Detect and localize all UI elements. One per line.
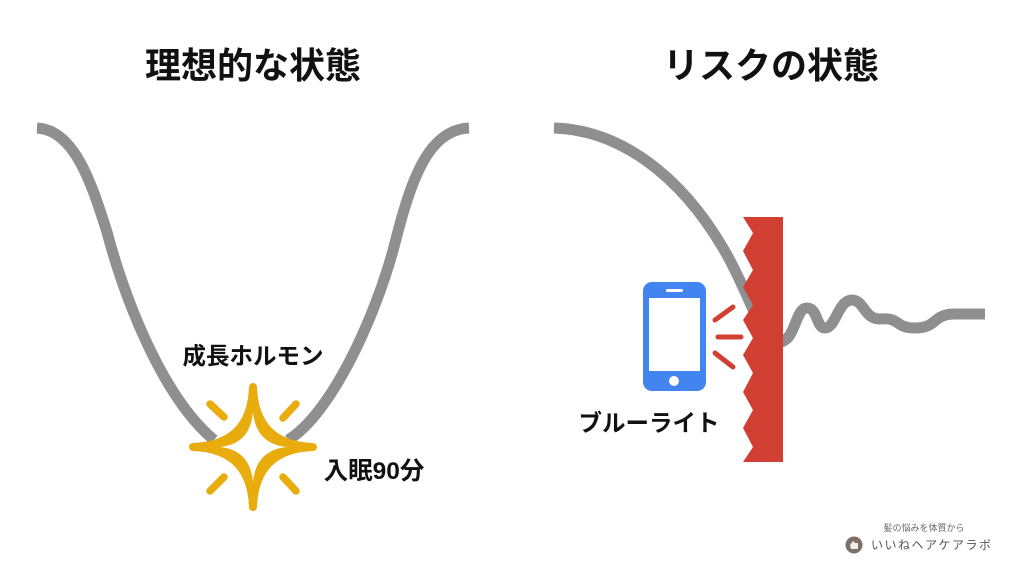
icon: smartphone [643,282,706,391]
panel: risk state [554,45,985,462]
logo: site brand [846,522,993,554]
label: growth hormone: 成長ホルモン [182,343,324,369]
icon: brand mark [846,536,862,554]
brand name: いいねヘアケアラボ [871,538,993,552]
icon: blue light rays [715,307,741,367]
heading: ideal state: 理想的な状態 [145,45,361,86]
curve: interrupted descent [554,128,756,316]
panel: ideal state [37,45,469,507]
barrier: red jagged wall [743,217,783,462]
heading: risk state: リスクの状態 [663,45,879,86]
icon: sparkle [193,387,313,507]
curve: shallow sleep after barrier [780,300,985,342]
label: first 90 minutes of sleep: 入眠90分 [324,457,425,485]
label: blue light: ブルーライト [578,409,720,436]
curve: deep sleep valley [37,128,469,440]
tagline: 髪の悩みを体質から [883,522,965,533]
